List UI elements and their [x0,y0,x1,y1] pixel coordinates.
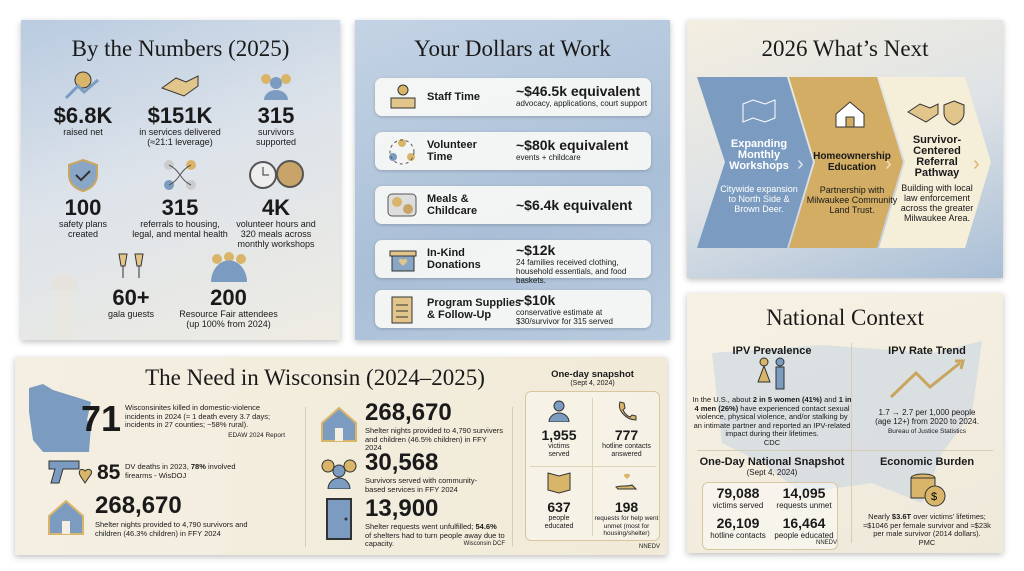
cell: hotline: answered [611,451,642,458]
panel: need in wisconsin [15,357,667,555]
row: volunteer: Volunteer [427,139,477,151]
chevrons: › [973,153,980,175]
snapshot: one-day: (Sept 4, 2024) [570,380,615,387]
row: staff time: advocacy, applications, court support [516,99,647,108]
title: The Need in Wisconsin (2024–2025) [145,365,485,390]
stat: safety plans: 100 [65,195,101,220]
stat: 13,900: Wisconsin DCF [464,541,505,547]
block: economic burden: $ [931,491,937,503]
stat: safety plans [59,159,107,239]
step: referral [901,100,974,223]
block: one-day national snapshot: 26,109 [717,515,759,531]
row: in-kind [375,240,651,278]
row: meals: Meals & [427,193,469,205]
stat: 30,568 [322,449,477,494]
step: referral: Survivor-Centered Referral Pathway [913,134,961,179]
panel: national context [687,293,1003,553]
step: workshops: Expanding Monthly Workshops [729,138,789,172]
stat: shelter nights mid: Shelter nights provided to 4,790 survivers and children (46.5% children) in FFY 2024 [365,426,503,452]
block: one-day national snapshot: 16,464 [783,515,825,531]
block: economic burden: Economic Burden [880,456,974,468]
stat: 85: 85 [97,461,120,484]
block: one-day national snapshot: people educated [774,531,834,540]
block: one-day national snapshot: hotline contacts [710,531,766,540]
row: in-kind: In-Kind [427,247,465,259]
stat: resource fair: (up 100% from 2024) [186,319,271,329]
stat: services: in services delivered [139,127,221,137]
stat: 71 [81,398,285,439]
stat: resource fair [179,252,278,329]
block: rate trend: IPV Rate Trend [888,345,966,357]
block: one-day national snapshot: requests unmet [776,501,832,510]
chevrons: › [797,153,804,175]
stat: 71: EDAW 2024 Report [228,432,285,438]
row: meals: ~$6.4k equivalent [516,197,632,213]
cell: unmet: 198 [615,499,638,515]
block: ipv prevalence: IPV Prevalence [733,345,811,357]
stat: services: $151K [148,103,212,128]
block: one-day national snapshot: victims served [713,501,763,510]
row: supplies: conservative estimate at [516,308,602,317]
icon: gift [390,250,416,272]
stat: referrals: legal, and mental health [132,229,228,239]
title: Your Dollars at Work [414,36,611,61]
cell: hotline [602,401,651,458]
cell: victims [541,400,577,458]
snapshot: one-day: NNEDV [639,544,660,550]
cell: educated: people [548,515,570,522]
block: one-day national snapshot [700,456,844,550]
row: volunteer: events + childcare [516,153,581,162]
cell: unmet: requests for help went unmet (most for housing/shelter) [595,515,658,537]
stat: volunteer hours: monthly workshops [237,239,315,249]
stat: shelter nights mid [321,399,503,452]
block: rate trend: 1.7 → 2.7 per 1,000 people [879,408,975,417]
row: supplies: ~$10k [516,292,555,308]
block: ipv prevalence [692,345,852,446]
stat: survivors: 315 [258,103,294,128]
cell: hotline: 777 [615,427,638,443]
cell: victims: victims [548,443,570,450]
stat: raised: $6.8K [54,103,112,128]
block: one-day national snapshot: NNEDV [816,540,837,546]
row: supplies: $30/survivor for 315 served [516,317,613,326]
title: National Context [766,305,924,330]
block: one-day national snapshot: 79,088 [717,485,759,501]
stat: gala: 60+ [112,285,150,310]
cell: educated: educated [545,523,573,530]
step: homeownership: Partnership with Milwaukee Community Land Trust. [807,185,897,215]
block: economic burden: PMC [919,538,935,546]
stat: raised: raised net [63,127,103,137]
chevrons [697,77,991,248]
stat: gala [108,254,154,319]
row: supplies: & Follow-Up [427,309,491,321]
stat: shelter nights left: Shelter nights provided to 4,790 survivors and children (46.3% children) in FFY 2024 [95,520,248,538]
icon: staff [390,84,416,108]
block: ipv prevalence: In the U.S., about 2 in 5 women (41%) and 1 in 4 men (26%) have experienced contact sexual violence, physical violence, and/or stalking by an intimate partner and reported an IPV-related impact during their lifetimes. [692,395,852,438]
row: in-kind: Donations [427,259,481,271]
block: one-day national snapshot: 14,095 [783,485,825,501]
stat: volunteer hours [236,160,316,249]
stat: volunteer hours: volunteer hours and [236,219,316,229]
dividers [851,343,852,543]
cell: educated: 637 [547,499,571,515]
stat: 30,568: 30,568 [365,449,438,476]
stat: services [139,75,221,147]
stat: shelter nights mid: 268,670 [365,399,452,426]
cell: victims: served [548,451,570,458]
block: economic burden: Nearly $3.6T over victims’ lifetimes; ≈$1046 per female survivor and ≈$23k per male survivor (2014 dollars). [863,512,991,538]
icon: volunteer [389,139,415,164]
step: workshops: Citywide expansion to North Side & Brown Deer. [720,184,798,214]
stat: shelter nights left [48,492,248,538]
row: volunteer: ~$80k equivalent [516,137,628,153]
stat: gala: gala guests [108,309,154,319]
stat: services: (≈21:1 leverage) [147,137,213,147]
stat: survivors [256,74,296,147]
row: supplies [375,290,651,328]
stat: shelter nights left: 268,670 [95,492,182,519]
title: 2026 What’s Next [762,36,928,61]
panel: 2026 what's next [687,20,1003,278]
stat: resource fair: 200 [210,285,247,310]
snapshot: one-day: One-day snapshot [551,369,634,380]
block: economic burden [863,456,991,546]
stat: referrals: 315 [162,195,198,220]
row: in-kind: household essentials, and food baskets. [516,267,626,285]
stat: 71: Wisconsinites killed in domestic-violence incidents in 2024 (≈ 1 death every 3.7 days; incidents in 27 counties; ~58% rural). [125,403,270,429]
block: rate trend: Bureau of Justice Statistics [888,428,966,435]
row: meals [375,186,651,224]
block: rate trend [875,345,979,435]
stat: 13,900 [326,495,505,548]
step: homeownership [807,102,898,215]
stat: volunteer hours: 4K [262,195,290,220]
stat: referrals: referrals to housing, [140,219,220,229]
map background [712,341,982,503]
block: one-day national snapshot: One-Day National Snapshot [700,456,844,468]
row: supplies: Program Supplies [427,297,521,309]
map: wisconsin [29,384,91,452]
row: staff time: ~$46.5k equivalent [516,83,640,99]
divider [512,407,513,547]
block: one-day national snapshot: (Sept 4, 2024) [747,468,797,477]
stat: 71: 71 [81,398,121,439]
icon: lighthouse [50,272,78,290]
row: in-kind: 24 families received clothing, [516,258,619,267]
block: rate trend: (age 12+) from 2020 to 2024. [875,417,979,426]
panel: by the numbers [21,20,340,340]
block: ipv prevalence: CDC [764,438,780,446]
title: By the Numbers (2025) [72,36,289,61]
stat: 85 [48,460,236,484]
row: volunteer [375,132,651,170]
row: volunteer: Time [427,151,452,163]
icon: meals [388,194,416,216]
stat: resource fair: Resource Fair attendees [179,309,278,319]
stat: volunteer hours: 320 meals across [241,229,311,239]
stat: referrals [132,160,228,239]
stat: survivors: supported [256,137,296,147]
row: staff time [375,78,651,116]
cell: unmet [594,474,658,537]
icon: gun [48,460,92,484]
row: staff time: Staff Time [427,91,480,103]
row: meals: Childcare [427,205,477,217]
stat: safety plans: created [68,229,98,239]
step: workshops [720,99,798,214]
stat: safety plans: safety plans [59,219,107,229]
snapshot: one-day [525,369,660,550]
stat: 30,568: Survivors served with community-based services in FFY 2024 [365,476,477,494]
stat: 13,900: Shelter requests went unfulfilled; 54.6% of shelters had to turn people away due to capacity. [365,522,505,548]
cell: hotline: hotline contacts [602,443,651,450]
stat: 13,900: 13,900 [365,495,438,522]
icon: clipboard [392,296,412,324]
step: homeownership: Homeownership Education [813,151,891,173]
chevrons: › [885,153,892,175]
stat: survivors: survivors [258,127,294,137]
panel: your dollars at work [355,20,670,340]
cell: victims: 1,955 [541,427,577,443]
row: in-kind: ~$12k [516,242,555,258]
cell: educated [544,472,573,530]
stat: raised [54,72,112,137]
stat: 85: DV deaths in 2023, 78% involved firearms - WisDOJ [125,462,236,480]
step: referral: Building with local law enforcement across the greater Milwaukee Area. [901,183,973,223]
divider [305,407,306,547]
